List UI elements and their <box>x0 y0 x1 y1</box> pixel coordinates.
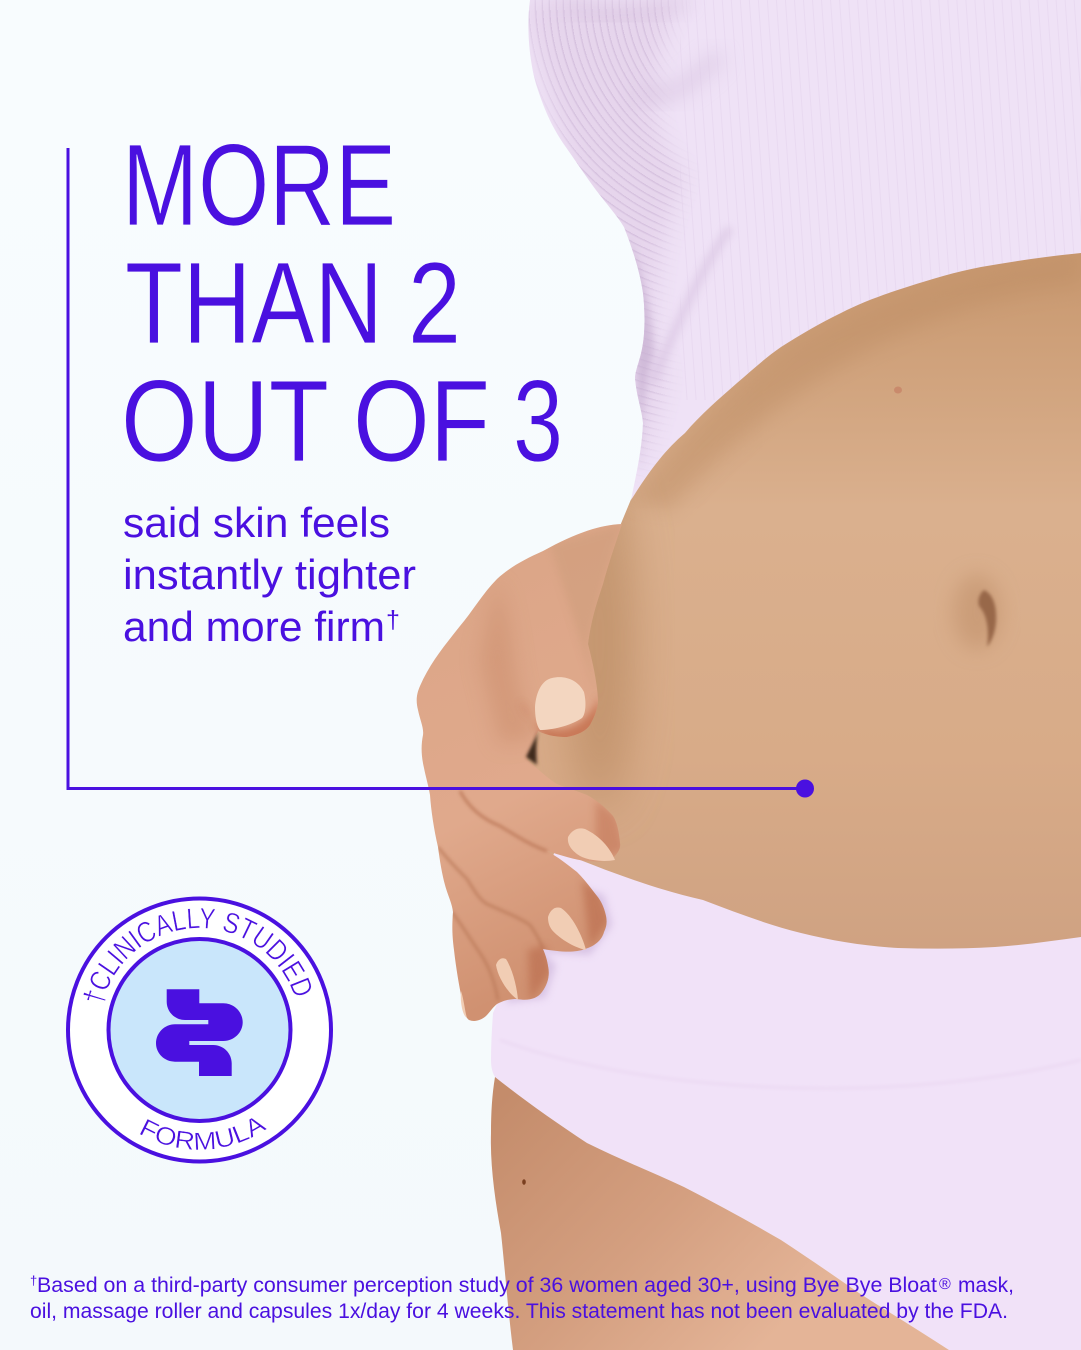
subheading <box>123 499 416 650</box>
footnote: Based on a third-party consumer perception study of 36 women aged 30+, using Bye Bye Bloat <box>37 1274 937 1297</box>
badge: curved top text: †CLINICALLY STUDIED <box>84 908 312 1001</box>
icon: thumbnail <box>535 677 585 730</box>
heading: THAN <box>125 238 383 368</box>
heading: 3 <box>513 356 563 486</box>
footnote: ® <box>939 1276 951 1293</box>
heading: 2 <box>408 238 461 368</box>
photo: gap between thumb and index finger <box>526 731 538 765</box>
icon: ring fingernail <box>496 958 518 1000</box>
photo: mole <box>522 1179 526 1185</box>
footnote: † <box>30 1273 37 1288</box>
photo: hand shadow on fabric <box>505 880 612 1003</box>
badge: curved bottom text: FORMULA <box>140 1118 267 1150</box>
heading <box>121 120 563 486</box>
heading: OUT <box>121 356 329 486</box>
icon: brand logo <box>156 989 243 1076</box>
photo: bare midriff skin <box>527 253 1081 949</box>
photo: navel <box>953 574 1001 650</box>
photo: lilac cropped top <box>500 0 1081 520</box>
heading: OF <box>353 356 490 486</box>
footnote <box>30 1273 1014 1323</box>
subheading: and more firm <box>123 603 385 650</box>
callout line with dot <box>68 148 814 798</box>
badge: clinically studied formula <box>66 896 333 1164</box>
photo: lilac briefs <box>491 850 1081 1350</box>
photo: skin mark <box>894 386 902 394</box>
icon: index fingernail <box>568 828 615 861</box>
icon: little fingernail <box>461 991 467 1018</box>
icon: middle fingernail <box>548 907 586 950</box>
footnote: mask, <box>958 1274 1014 1297</box>
photo: hand <box>410 515 630 1030</box>
photo: upper thigh skin <box>491 1077 949 1350</box>
photo: torso with hand <box>410 0 1081 1350</box>
subheading: said skin feels <box>123 499 390 546</box>
heading: MORE <box>122 120 396 250</box>
subheading: † <box>386 606 400 634</box>
footnote: oil, massage roller and capsules 1x/day for 4 weeks. This statement has not been evaluated by the FDA. <box>30 1300 1008 1323</box>
subheading: instantly tighter <box>123 551 416 598</box>
